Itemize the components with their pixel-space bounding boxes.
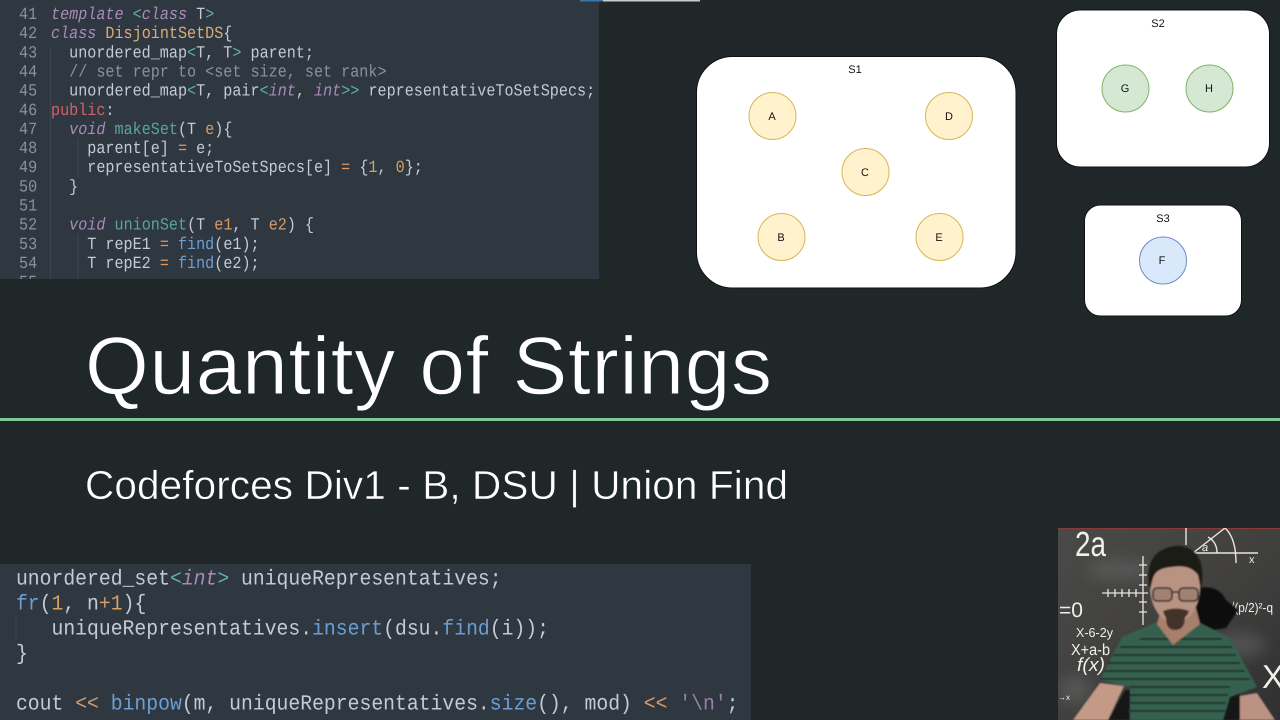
node D: D [945,111,953,123]
node H [1186,65,1233,112]
presenter hair [1148,546,1202,590]
node B: B [777,232,785,244]
code listing: DisjointSetDS class: 46 [19,102,37,121]
code listing: DisjointSetDS class: 52 [19,217,37,236]
panel: set S1 [696,56,1016,288]
node F [1140,237,1186,284]
code listing: DisjointSetDS class: 55 [19,274,37,293]
code listing: DisjointSetDS class: // set repr to <set size, set rank> [51,64,387,82]
code listing: counting unique representatives: fr(1, n+1){ [16,592,146,616]
node F: F [1159,255,1166,267]
node A: A [768,111,776,123]
code listing: DisjointSetDS class: unordered_map<T, T> parent; [51,44,314,63]
code listing: counting unique representatives: uniqueRepresentatives.insert(dsu.find(i)); [16,618,549,642]
code listing: DisjointSetDS class: 54 [19,255,37,274]
chalkboard writing: →x [1058,693,1070,702]
panel: set S2 [1056,10,1270,167]
chalkboard writing: -√(p/2)²-q [1224,600,1273,615]
divider line [0,418,1280,421]
node E: E [935,232,943,244]
panel: top code editor [0,0,599,293]
code listing: DisjointSetDS class: 42 [19,25,37,44]
presenter neck and face [1150,551,1200,645]
code listing: DisjointSetDS class: unordered_map<T, pair<int, int>> representativeToSetSpecs; [51,83,595,102]
code listing: DisjointSetDS class: 53 [19,236,37,255]
code listing: DisjointSetDS class: 51 [19,198,37,216]
chalkboard writing: 2a [1075,525,1106,564]
code listing: DisjointSetDS class: template <class T> [51,6,214,25]
presenter t-shirt [1100,622,1257,720]
node H: H [1205,83,1213,95]
chalkboard writing: a [1202,542,1208,554]
chalkboard writing: x [1249,554,1255,566]
chalkboard writing: f(x) [1077,655,1105,676]
chalkboard writing: X+a-b [1071,642,1110,659]
panel: set S2: S2 [1151,18,1165,30]
code listing: DisjointSetDS class: 50 [19,178,37,197]
code listing: DisjointSetDS class [19,6,595,293]
panel: set S1: S1 [848,64,862,76]
presenter arms [1073,683,1124,720]
code listing: DisjointSetDS class: 41 [19,6,37,25]
code listing: DisjointSetDS class: representativeToSetSpecs[e] = {1, 0}; [51,159,423,178]
code listing: DisjointSetDS class: T repE1 = find(e1); [51,236,260,255]
code listing: DisjointSetDS class: 49 [19,159,37,178]
code listing: counting unique representatives: cout << binpow(m, uniqueRepresentatives.size(), mod) << '\n'; [16,692,739,716]
presenter figure [1073,546,1275,720]
code listing: DisjointSetDS class: 44 [19,64,37,82]
subtitle: Codeforces Div1 - B, DSU | Union Find [85,462,788,508]
code listing: DisjointSetDS class: parent[e] = e; [51,140,214,159]
code listing: counting unique representatives: unordered_set<int> uniqueRepresentatives; [16,568,502,592]
code listing: DisjointSetDS class: class DisjointSetDS{ [51,25,232,44]
code listing: counting unique representatives: } [16,642,28,666]
black chair shape [1196,586,1238,630]
presenter beard [1163,608,1189,630]
title: Quantity of Strings [85,321,772,412]
code listing: DisjointSetDS class: 47 [19,121,37,140]
code listing: DisjointSetDS class: T repE2 = find(e2); [51,255,260,274]
panel: bottom code snippet [0,564,751,720]
top window edge highlight [580,0,700,2]
presenter glasses [1153,588,1198,601]
code listing: DisjointSetDS class: void makeSet(T e){ [51,121,232,140]
node G [1102,65,1149,112]
panel: set S3: S3 [1156,213,1170,225]
chalkboard writing [1058,525,1280,702]
code listing: counting unique representatives [16,568,739,716]
panel: presenter webcam [1058,525,1280,720]
node B [758,214,805,260]
node E [916,214,963,260]
code listing: DisjointSetDS class: } [51,178,78,197]
code listing: DisjointSetDS class: 48 [19,140,37,159]
code listing: DisjointSetDS class: 45 [19,83,37,102]
chalk smears [1059,560,1265,704]
node C [842,148,889,196]
code listing: DisjointSetDS class: public: [51,102,115,121]
node C: C [861,167,869,179]
node G: G [1121,83,1129,95]
code listing: DisjointSetDS class: void unionSet(T e1, T e2) { [51,217,314,236]
node D [926,92,972,140]
chalkboard writing: =0 [1059,599,1083,622]
code listing: DisjointSetDS class: 43 [19,44,37,63]
chalkboard writing: X-6-2y [1076,625,1113,640]
node A [749,92,796,140]
panel: set S3 [1084,205,1242,316]
